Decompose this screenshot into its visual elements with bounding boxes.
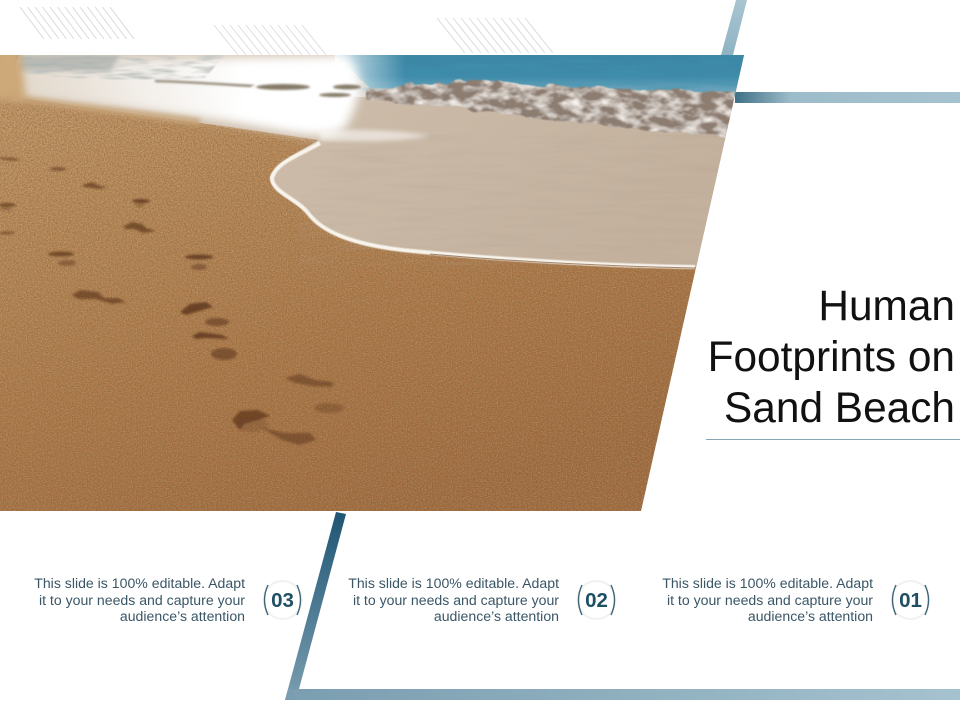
text block 03: audience’s attention xyxy=(120,608,245,624)
number badge 01 xyxy=(890,580,930,620)
title underline xyxy=(706,439,960,440)
shore dark line xyxy=(430,254,695,268)
right horizontal bar xyxy=(735,92,960,103)
hatching: top middle xyxy=(214,25,326,55)
number badge 03 xyxy=(262,580,302,620)
item 01 xyxy=(662,575,930,624)
number badge 02 xyxy=(576,580,616,620)
water ripples xyxy=(300,213,482,265)
text block 01: it to your needs and capture your xyxy=(667,592,873,608)
sea surface xyxy=(335,55,760,98)
text block 02 xyxy=(348,575,559,624)
foam edge xyxy=(272,143,695,267)
item 02 xyxy=(348,575,616,624)
text block 02: it to your needs and capture your xyxy=(353,592,559,608)
glare streak over wet water xyxy=(320,130,430,141)
number badge 02: 02 xyxy=(585,589,608,612)
title: Footprints on xyxy=(708,333,955,380)
breaking wave xyxy=(366,80,736,136)
lower slanted and bottom frame bar xyxy=(285,512,960,700)
hatching: top left xyxy=(20,7,134,39)
beach photo xyxy=(0,50,760,515)
text block 02: audience’s attention xyxy=(434,608,559,624)
title: Human xyxy=(818,282,955,329)
text block 01: This slide is 100% editable. Adapt xyxy=(662,575,873,591)
number badge 03: 03 xyxy=(271,589,294,612)
title xyxy=(708,282,955,431)
text block 02: This slide is 100% editable. Adapt xyxy=(348,575,559,591)
footprints xyxy=(0,157,344,445)
text block 03: This slide is 100% editable. Adapt xyxy=(34,575,245,591)
sand grain xyxy=(0,55,760,515)
text block 01 xyxy=(662,575,873,624)
number badge 01: 01 xyxy=(899,589,922,612)
text block 03 xyxy=(34,575,245,624)
text block 01: audience’s attention xyxy=(748,608,873,624)
title: Sand Beach xyxy=(724,384,955,431)
distant wave strips xyxy=(155,80,361,97)
sun glare xyxy=(25,55,359,135)
soft sand to water transition xyxy=(0,50,26,100)
shallow water sheet xyxy=(15,55,760,268)
text block 03: it to your needs and capture your xyxy=(39,592,245,608)
far grey water xyxy=(18,55,225,80)
hatching: top right xyxy=(437,18,553,53)
top slanted bar xyxy=(721,0,747,55)
item 03 xyxy=(34,575,302,624)
